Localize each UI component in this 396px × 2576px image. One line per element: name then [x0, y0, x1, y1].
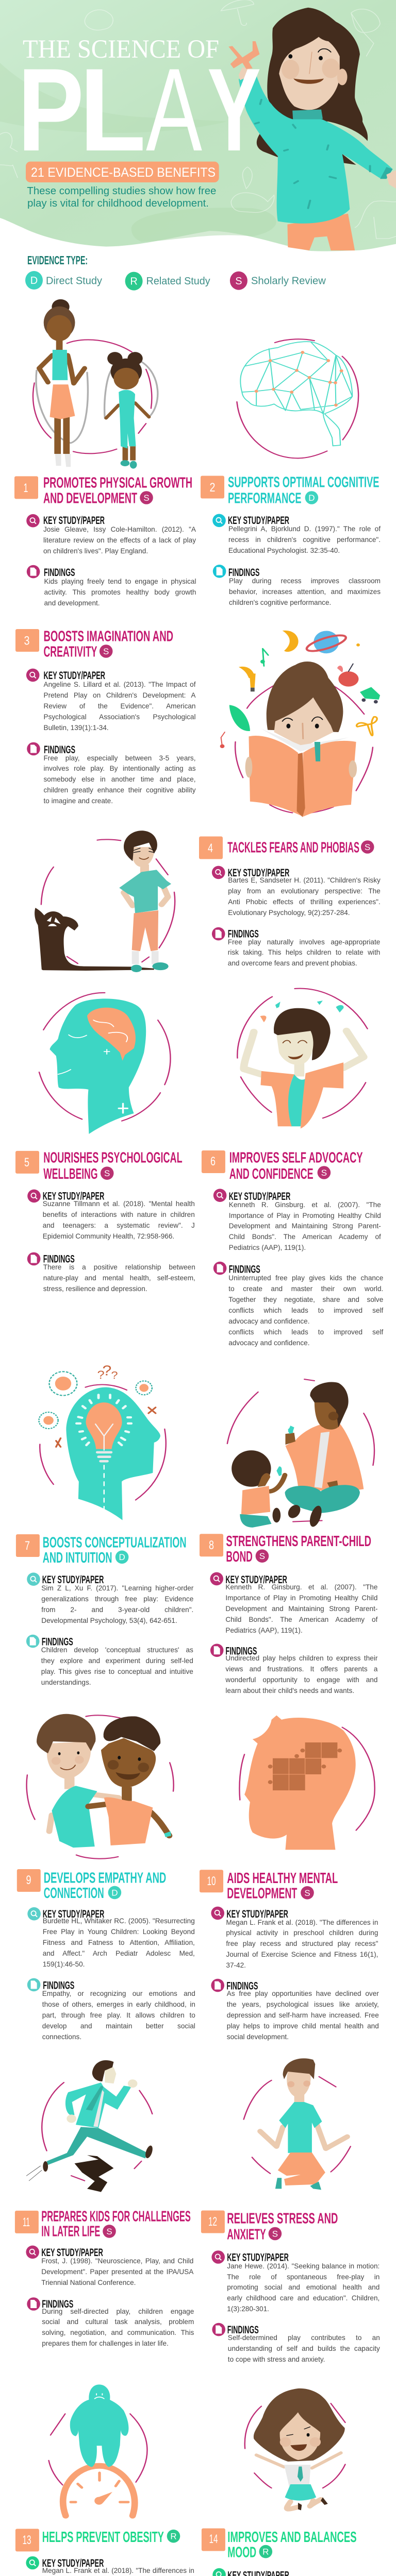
- panel: benefit 10: [200, 1715, 379, 2043]
- legend item: scholarly review: S: [235, 276, 242, 287]
- title: The Science of: THE SCIENCE OF: [23, 35, 219, 64]
- number badge: 9: [26, 1873, 31, 1887]
- key study: Psychological Association's Psychological: [43, 713, 196, 721]
- findings: conflicts which leads to improved self: [228, 1328, 383, 1336]
- heading: IN LATER LIFE: [41, 2224, 100, 2240]
- panel: benefit 14: [202, 2388, 380, 2576]
- key study: Sim Z L, Xu F. (2017). "Learning higher-order: [41, 1584, 193, 1592]
- panel: benefit 13: [15, 2384, 194, 2576]
- findings: FINDINGS: [226, 1980, 258, 1992]
- panel: benefit 2: [201, 339, 381, 608]
- number badge: 11: [23, 2215, 30, 2229]
- findings: involves role play. By intentionally acting as: [43, 765, 196, 772]
- findings: to imagine and create.: [43, 797, 113, 805]
- key study: KEY STUDY/PAPER: [227, 2252, 289, 2264]
- findings: the years, psychological issues like anxiety,: [227, 2001, 379, 2008]
- illustration: kids skipping rope: [33, 299, 158, 469]
- key study: KEY STUDY/PAPER: [228, 867, 289, 879]
- findings: play. This gives rise to conceptual and intuitive: [41, 1668, 193, 1675]
- illustration: jumping happy girl: [245, 2388, 345, 2511]
- number badge: 7: [25, 1539, 30, 1553]
- findings: advocacy and confidence.: [228, 1339, 309, 1347]
- panel: benefit 4: [35, 831, 381, 972]
- heading: AND INTUITION: [43, 1550, 112, 1566]
- key study: KEY STUDY/PAPER: [225, 1574, 287, 1586]
- key study: [212, 514, 381, 556]
- findings: activity. This promotes healthy body growth: [44, 588, 196, 596]
- heading: S: [272, 2229, 278, 2239]
- hero background: [0, 0, 396, 251]
- heading: D: [119, 1552, 125, 1562]
- number badge: [15, 2211, 39, 2233]
- heading: S: [259, 1551, 265, 1561]
- hero banner: [0, 0, 396, 251]
- key study: [26, 2556, 194, 2576]
- number badge: 8: [209, 1538, 214, 1552]
- key study: early childhood care and education". Children,: [227, 2294, 380, 2302]
- illustration: head with light bulb and gears: ?: [97, 1369, 105, 1381]
- key study: Evolutionary Psychology, 9(2):257-284.: [228, 909, 350, 917]
- panel: benefit 8: [200, 1379, 377, 1697]
- key study: physical activity in preschool children during: [226, 1929, 378, 1937]
- key study: [211, 2250, 380, 2315]
- key study: on children's lives". Play England.: [43, 547, 148, 555]
- key study: benefits of interactions with nature in children: [43, 1211, 195, 1218]
- findings: Undirected play helps children to express their: [225, 1654, 377, 1662]
- key study: [27, 1190, 195, 1242]
- findings: social development.: [227, 2033, 289, 2041]
- illustration: head with light bulb and gears: ?: [102, 1363, 111, 1379]
- findings: stress, resilience and depression.: [43, 1285, 147, 1293]
- findings: FINDINGS: [225, 1646, 257, 1657]
- legend item: related study: [125, 272, 210, 291]
- title: Play: Y: [207, 44, 261, 176]
- panel: benefit 6: [202, 989, 383, 1350]
- findings: understandings.: [41, 1679, 91, 1686]
- findings: [212, 927, 380, 970]
- legend item: related study: R: [130, 276, 138, 287]
- illustration: meditating boy: [244, 2058, 351, 2190]
- key study: [27, 1907, 195, 1970]
- number badge: [15, 2529, 39, 2551]
- number badge: [15, 629, 39, 652]
- heading: [43, 628, 173, 660]
- key study: generalizations through free play: Evidence: [41, 1595, 193, 1603]
- key study: Development and Maintaining Strong Parent-: [225, 1605, 377, 1613]
- findings: [27, 2297, 194, 2349]
- number badge: 3: [24, 634, 30, 648]
- findings: [27, 1252, 195, 1295]
- key study: KEY STUDY/PAPER: [43, 1908, 104, 1920]
- heading: NOURISHES PSYCHOLOGICAL: [43, 1150, 183, 1166]
- key study: Megan L. Frank et al. (2018). "The differences in: [42, 2567, 194, 2574]
- key study: Kenneth R. Ginsburg. et al. (2007). "The: [225, 1583, 377, 1591]
- panel: benefit 9: [17, 1714, 195, 2043]
- illustration: runner leaping a crack: [26, 2060, 154, 2192]
- findings: Uninterrupted free play gives kids the chance: [228, 1274, 383, 1282]
- key study: 37-42.: [226, 1961, 246, 1969]
- doodles: background toys: [0, 0, 396, 239]
- key study: recess in children's cognitive performance".: [228, 536, 381, 544]
- number badge: [17, 1869, 41, 1892]
- heading: MOOD: [227, 2544, 256, 2561]
- number badge: 1: [24, 481, 28, 495]
- findings: [27, 565, 196, 609]
- findings: Children develop 'conceptual structures' as: [41, 1646, 193, 1654]
- findings: [212, 2323, 380, 2365]
- findings: [211, 1979, 379, 2043]
- title: Play: A: [146, 44, 202, 176]
- key study: Development and Maintaining Strong Parent-: [229, 1222, 381, 1230]
- key study: [26, 514, 196, 557]
- panel: benefit 12: [201, 2058, 380, 2365]
- key study: Child Bonds". The American Academy of: [225, 1616, 377, 1623]
- findings: risk taking. This helps children to relate with: [228, 948, 380, 956]
- number badge: [15, 1151, 39, 1174]
- intro text: play is vital for childhood development.: [27, 198, 209, 209]
- subtitle banner: [26, 162, 219, 182]
- findings: learn about their child's needs and wants.: [225, 1687, 354, 1694]
- number badge: [200, 1534, 223, 1556]
- heading: S: [143, 493, 150, 503]
- heading: [41, 2208, 191, 2240]
- findings: FINDINGS: [228, 567, 260, 579]
- key study: Anti Phobic effects of thrilling experiences".: [228, 898, 381, 906]
- key study: and Affect." Arch Pediatr Adolesc Med,: [43, 1950, 195, 1957]
- findings: develop and maintain better social: [42, 2022, 195, 2030]
- heading: ANXIETY: [227, 2227, 266, 2243]
- key study: Developmental Psychology, 53(4), 642-651.: [41, 1617, 177, 1624]
- findings: solving, negotiation, and communication. This: [42, 2329, 194, 2336]
- number badge: [199, 837, 223, 859]
- heading: R: [170, 2532, 177, 2541]
- key study: play from an evolutionary perspective: The: [228, 887, 381, 895]
- illustration: boy facing scary shadow: [35, 831, 175, 972]
- key study: Kenneth R. Ginsburg. et al. (2007). "The: [229, 1201, 381, 1209]
- panel: benefit 5: [15, 993, 195, 1295]
- findings: they explore and experiment during self-led: [41, 1657, 193, 1665]
- heading: S: [106, 2227, 112, 2236]
- key study: Journal of Exercise Science and Fitness 16(1),: [226, 1951, 378, 1958]
- heading: [43, 474, 192, 507]
- key study: [212, 2568, 380, 2576]
- key study: [27, 1572, 193, 1626]
- heading: AND CONFIDENCE: [229, 1166, 314, 1182]
- findings: Empathy, or recognizing our emotions and: [42, 1990, 195, 1997]
- key study: Pediatrics (AAP), 119(1).: [225, 1626, 303, 1634]
- number badge: [202, 2529, 225, 2551]
- number badge: [201, 2210, 225, 2233]
- key study: Triennial National Conference.: [41, 2279, 136, 2286]
- findings: connections.: [42, 2033, 81, 2041]
- key study: Development". Paper presented at the IPA/USA: [41, 2268, 193, 2276]
- heading: D: [308, 493, 315, 503]
- findings: understanding of self and builds the capacity: [228, 2345, 380, 2352]
- findings: Free play, especially between 3-5 years,: [43, 754, 196, 761]
- findings: and overcome fears and prevent phobias.: [228, 959, 357, 967]
- key study: [26, 669, 196, 734]
- key study: KEY STUDY/PAPER: [42, 1574, 104, 1586]
- key study: Importance of Play in Promoting Healthy Child: [225, 1594, 377, 1602]
- findings: wonderful opportunity to engage with and: [225, 1676, 377, 1684]
- key study: KEY STUDY/PAPER: [226, 1908, 288, 1920]
- findings: children greatly enhance their cognitive ability: [43, 786, 196, 794]
- heading: AND DEVELOPMENT: [43, 490, 137, 507]
- heading: R: [262, 2547, 269, 2557]
- heading: PREPARES KIDS FOR CHALLENGES: [41, 2208, 191, 2225]
- findings: FINDINGS: [44, 567, 75, 579]
- key study: 159(1):46-50.: [43, 1960, 85, 1968]
- number badge: [202, 1150, 225, 1173]
- findings: those of others, emerges in early childhood, in: [42, 2001, 195, 2008]
- illustration: parent and child playing: [227, 1379, 374, 1528]
- findings: FINDINGS: [227, 2324, 259, 2336]
- key study: Megan L. Frank et al. (2018). "The differences in: [226, 1919, 378, 1926]
- key study: KEY STUDY/PAPER: [43, 1191, 104, 1202]
- panel: benefit 1: [14, 299, 196, 609]
- findings: FINDINGS: [42, 2298, 73, 2310]
- illustration: confident girl: [237, 989, 368, 1128]
- findings: FINDINGS: [228, 928, 259, 940]
- key study: Pellegrini A, Bjorklund D. (1997)." The role of: [228, 525, 381, 533]
- key study: Pediatrics (AAP), 119(1).: [229, 1244, 306, 1251]
- heading: BOOSTS IMAGINATION AND: [43, 628, 173, 645]
- legend item: direct study: [25, 271, 102, 290]
- findings: Free play naturally involves age-appropriate: [228, 938, 380, 946]
- heading: S: [304, 1888, 310, 1898]
- key study: Epidemiol Community Health, 72:958-966.: [43, 1232, 174, 1240]
- legend item: scholarly review: Sholarly Review: [251, 275, 326, 286]
- findings: play helps to improve child mental health and: [227, 2022, 379, 2030]
- heading: WELLBEING: [43, 1166, 98, 1182]
- key study: Child Bonds". The American Academy of: [229, 1233, 381, 1241]
- heading: [229, 1150, 363, 1182]
- key study: Bulletin, 139(1):1-34.: [43, 724, 109, 732]
- key study: Jane Hewe. (2014). "Seeking balance in motion:: [227, 2262, 380, 2270]
- findings: FINDINGS: [44, 744, 75, 756]
- heading: [226, 1533, 371, 1565]
- illustration: head with light bulb and gears: ?: [111, 1369, 118, 1381]
- key study: [210, 1572, 377, 1636]
- heading: RELIEVES STRESS AND: [227, 2211, 338, 2227]
- intro text: These compelling studies show how free: [27, 185, 216, 197]
- panel: benefit 11: [15, 2060, 194, 2349]
- panel: benefit 3: [15, 628, 380, 817]
- heading: PROMOTES PHYSICAL GROWTH: [43, 474, 192, 491]
- heading: S: [104, 1168, 110, 1178]
- key study: Bartes E, Sandseter H. (2011). "Children's Risky: [228, 876, 381, 884]
- findings: depression and self-harm have increased. Free: [227, 2011, 379, 2019]
- illustration: head with puzzle pieces: [239, 1715, 375, 1850]
- illustration: head with brain: [39, 993, 170, 1134]
- findings: [27, 742, 195, 807]
- key study: KEY STUDY/PAPER: [42, 2557, 104, 2569]
- legend: evidence type: [25, 253, 326, 291]
- findings: FINDINGS: [42, 1636, 73, 1648]
- findings: part, through free play. It allows children to: [42, 2011, 195, 2019]
- number badge: 6: [210, 1155, 216, 1168]
- legend item: direct study: Direct Study: [46, 275, 102, 286]
- heading: HELPS PREVENT OBESITY: [42, 2529, 164, 2546]
- key study: KEY STUDY/PAPER: [228, 515, 289, 527]
- key study: literature review on the effects of a lack of play: [43, 536, 196, 544]
- heading: [43, 1150, 183, 1182]
- key study: Importance of Play in Promoting Healthy Child: [229, 1212, 381, 1219]
- key study: Suzanne Tillmann et al. (2018). "Mental health: [43, 1200, 195, 1208]
- findings: FINDINGS: [43, 1253, 75, 1265]
- heading: [43, 1535, 187, 1566]
- key study: [213, 1189, 381, 1254]
- panel: benefit 7: [16, 1363, 193, 1688]
- key study: The role of spontaneous free-play in: [227, 2273, 380, 2281]
- title: Play: P: [18, 44, 84, 176]
- key study: Josie Gleave, Issy Cole-Hamilton. (2012). "A: [43, 526, 196, 533]
- heading: [227, 2211, 338, 2243]
- key study: Free Play in Young Children: Looking Beyond: [43, 1928, 195, 1936]
- findings: Self-determined play contributes to an: [228, 2334, 380, 2342]
- illustration: head with light bulb and gears: [39, 1363, 166, 1520]
- heading: BOND: [226, 1549, 253, 1565]
- heading: [44, 1870, 166, 1902]
- key study: [211, 1907, 378, 1971]
- findings: Play during recess improves classroom: [229, 577, 381, 585]
- number badge: 4: [208, 841, 213, 855]
- legend item: direct study: D: [30, 275, 38, 286]
- key study: [212, 866, 381, 919]
- heading: D: [111, 1888, 118, 1897]
- findings: [213, 1262, 383, 1350]
- findings: behavior, increases attention, and maximizes: [229, 588, 381, 596]
- findings: [213, 565, 381, 608]
- findings: to cope with stress and anxiety.: [228, 2355, 325, 2363]
- heading: [228, 474, 380, 507]
- key study: Angeline S. Lillard et al. (2013). "The Impact of: [43, 681, 196, 688]
- findings: views and frustrations. It offers parents a: [225, 1665, 377, 1673]
- key study: KEY STUDY/PAPER: [43, 670, 105, 682]
- number badge: [200, 1870, 223, 1892]
- heading: S: [321, 1168, 327, 1178]
- findings: There is a positive relationship between: [43, 1263, 195, 1271]
- findings: [210, 1643, 377, 1697]
- heading: BOOSTS CONCEPTUALIZATION: [43, 1535, 187, 1551]
- heading: CREATIVITY: [43, 644, 97, 660]
- number badge: [14, 476, 38, 499]
- findings: social and cultural task analysis, problem: [42, 2318, 194, 2326]
- title: Play: [18, 44, 261, 176]
- key study: KEY STUDY/PAPER: [229, 1191, 290, 1202]
- number badge: 12: [208, 2215, 217, 2229]
- number badge: 5: [24, 1156, 29, 1170]
- illustration: figure on weighing scale: [49, 2384, 147, 2516]
- heading: S: [103, 647, 109, 656]
- heading: [227, 2529, 357, 2561]
- findings: prepares them for challenges in later life.: [42, 2340, 169, 2347]
- findings: [26, 1635, 193, 1688]
- key study: Pretend Play on Children's Development: A: [43, 691, 196, 699]
- key study: Educational Psychologist. 32:35-40.: [228, 547, 340, 554]
- findings: FINDINGS: [43, 1979, 74, 1991]
- key study: Frost, J. (1998). "Neuroscience, Play, and Child: [41, 2257, 193, 2265]
- number badge: 2: [209, 481, 216, 495]
- key study: 1(3):280-301.: [227, 2305, 269, 2313]
- number badge: 10: [207, 1874, 216, 1888]
- heading: DEVELOPS EMPATHY AND: [44, 1870, 166, 1887]
- illustration: brain network: [237, 339, 358, 458]
- illustration: child reading with imagination objects: [220, 631, 380, 817]
- findings: Kids playing freely tend to engage in physical: [44, 578, 196, 585]
- legend heading: EVIDENCE TYPE:: [27, 253, 88, 267]
- illustration: two friends: [27, 1714, 174, 1859]
- number badge: 14: [209, 2532, 218, 2546]
- findings: children's cognitive performance.: [229, 599, 331, 606]
- findings: As free play opportunities have declined over: [227, 1990, 379, 1997]
- key study: Fitness and Fatness to Attention, Affiliation,: [43, 1939, 195, 1946]
- key study: Review of the Evidence". American: [43, 702, 196, 710]
- number badge: [16, 1534, 40, 1557]
- key study: and teenagers: a systematic review". J: [43, 1222, 195, 1229]
- heading: [227, 1870, 338, 1902]
- findings: conflicts which leads to improved self: [228, 1307, 383, 1314]
- title: Play: L: [79, 44, 146, 176]
- key study: from 2- and 3-year-old children".: [41, 1606, 193, 1614]
- findings: somebody else in another time and place,: [43, 775, 196, 783]
- findings: [27, 1978, 195, 2043]
- findings: to create and master their own world.: [228, 1285, 383, 1293]
- legend item: related study: Related Study: [146, 276, 210, 287]
- intro text: [27, 185, 216, 209]
- findings: advocacy and confidence.: [228, 1317, 309, 1325]
- subtitle banner: 21 EVIDENCE-BASED BENEFITS: [31, 165, 216, 180]
- findings: Together they negotiate, share and solve: [228, 1296, 383, 1303]
- legend item: scholarly review: [230, 272, 326, 290]
- findings: nature-play and mental health, self-esteem,: [43, 1274, 195, 1282]
- findings: FINDINGS: [229, 1263, 260, 1276]
- key study: promoting social and emotional health and: [227, 2283, 380, 2291]
- number badge: [201, 476, 224, 499]
- heading: S: [365, 842, 370, 852]
- key study: KEY STUDY/PAPER: [41, 2247, 103, 2259]
- heading: DEVELOPMENT: [227, 1885, 297, 1902]
- heading: PERFORMANCE: [228, 490, 301, 507]
- findings: and development.: [44, 599, 100, 607]
- findings: During self-directed play, children engage: [42, 2307, 194, 2315]
- number badge: 13: [23, 2533, 31, 2547]
- key study: KEY STUDY/PAPER: [43, 515, 105, 527]
- illustration: girl with toy plane: [228, 8, 396, 250]
- key study: [26, 2245, 193, 2289]
- key study: Burdette HL, Whitaker RC. (2005). "Resurrecting: [43, 1917, 195, 1925]
- heading: CONNECTION: [44, 1885, 104, 1902]
- key study: free play recess and structured play recess": [226, 1940, 378, 1947]
